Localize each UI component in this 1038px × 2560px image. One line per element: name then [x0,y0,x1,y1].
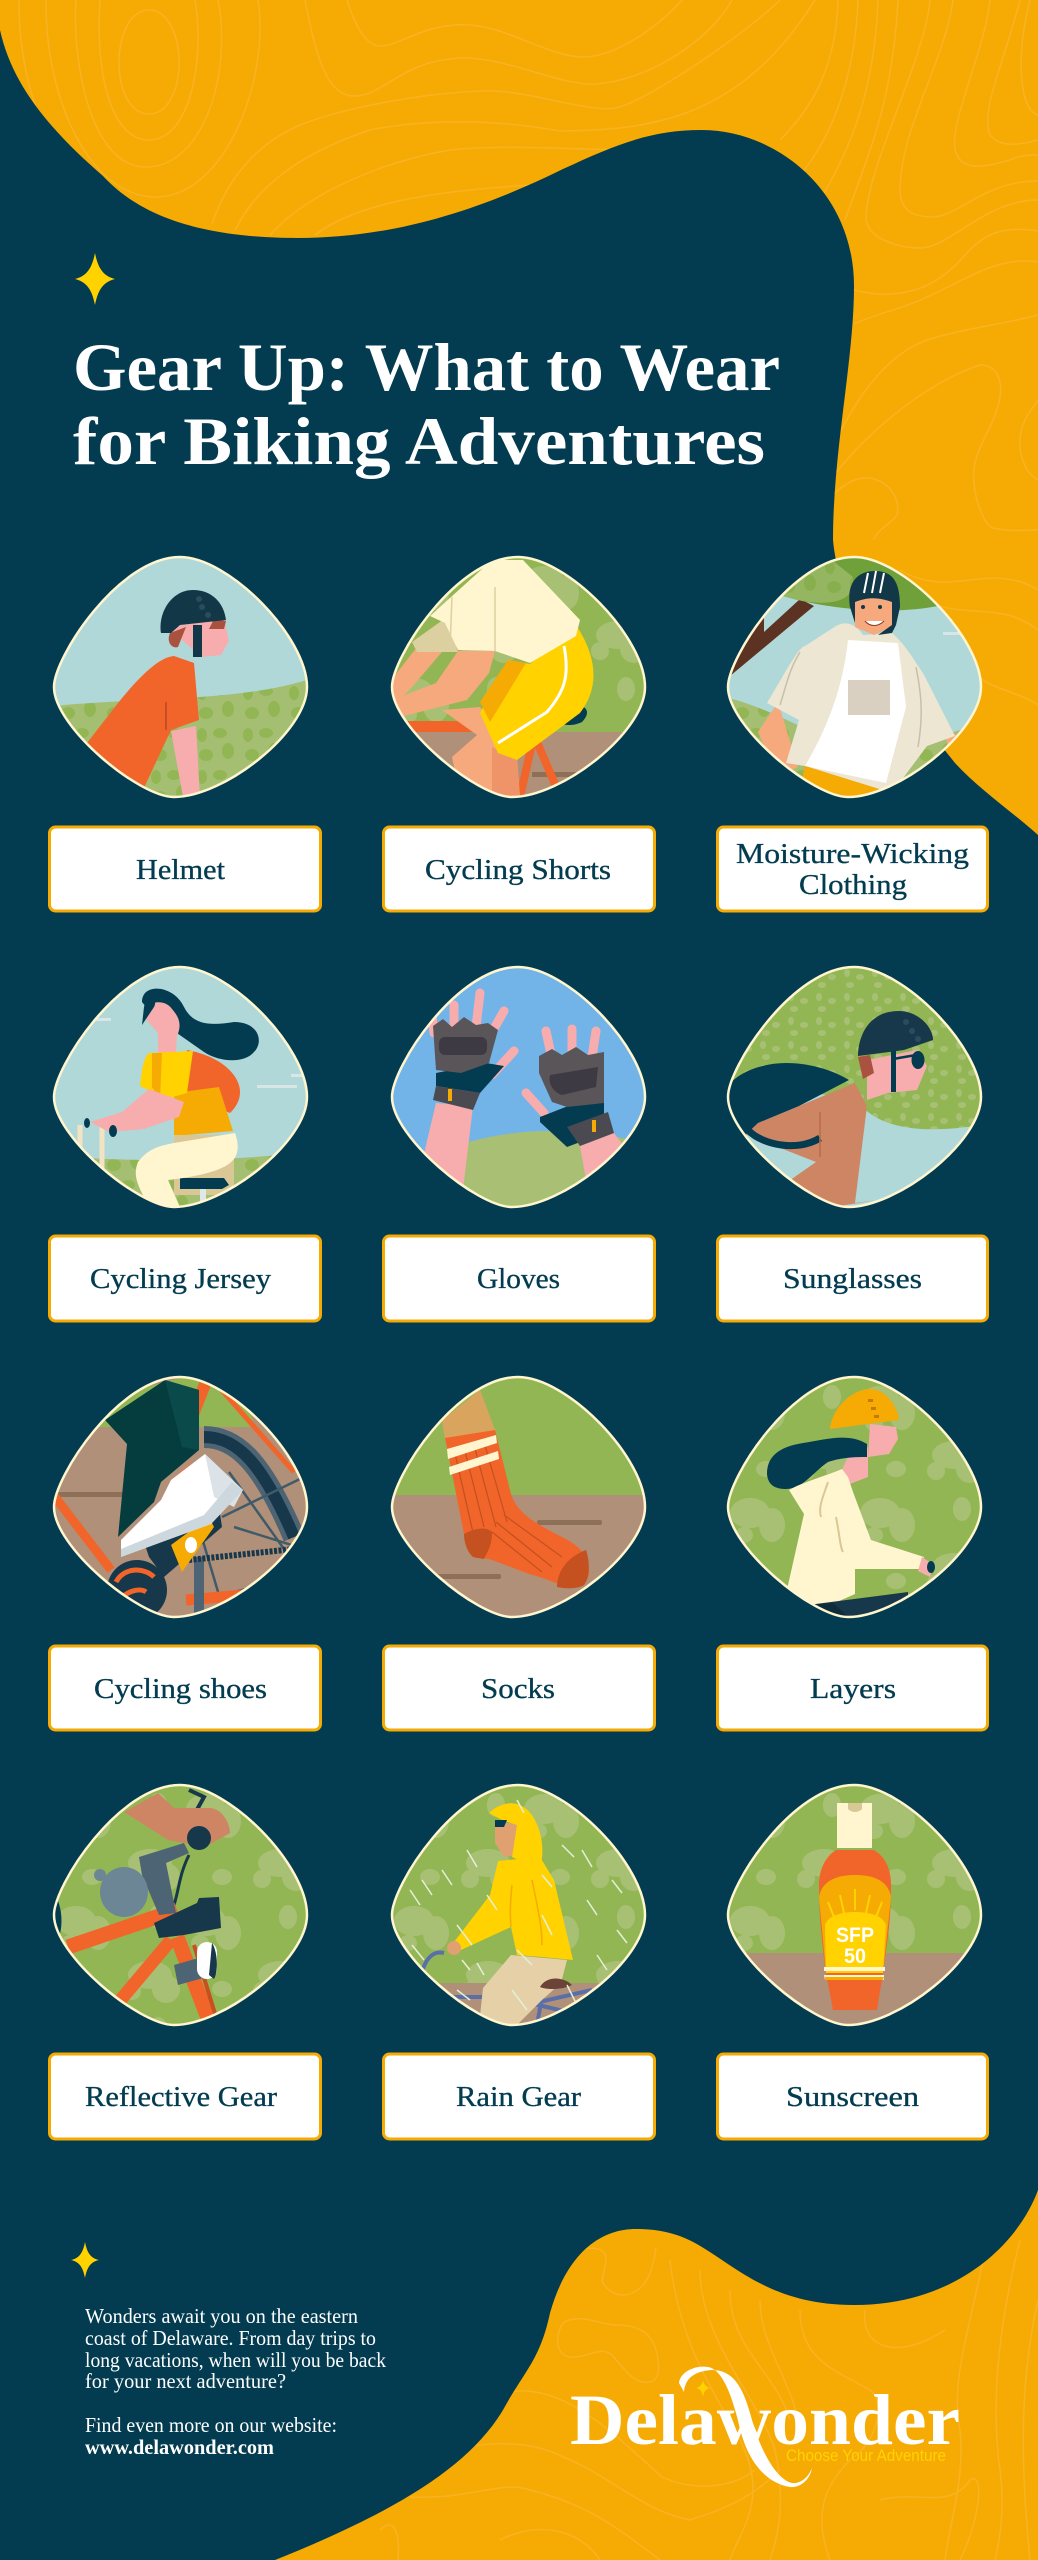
icon: top sparkle [75,253,115,305]
sfp label text: 50 [844,1945,866,1968]
sfp label text: SFP [836,1924,874,1947]
footer text [85,2304,386,2459]
label: sunscreen [718,2054,988,2139]
label: sunglasses: Sunglasses [783,1263,922,1295]
label: moisture-wicking clothing [718,827,988,911]
label: moisture-wicking clothing: Moisture-Wicking [736,838,969,870]
label: cycling shoes [50,1646,320,1730]
label: layers: Layers [810,1673,896,1705]
logo: Delawonder: Choose Your Adventure [786,2446,946,2465]
logo: Delawonder [570,2367,960,2487]
panel: sunscreen [718,1785,988,2139]
panel: sunglasses [718,967,988,1321]
panel: rain gear [384,1785,654,2139]
panel: cycling shorts [384,557,654,911]
label: helmet [50,827,320,911]
label: rain gear [384,2054,654,2139]
panel: helmet [50,557,320,911]
label: helmet: Helmet [136,854,225,886]
label: cycling shorts [384,827,654,911]
icon: bottom sparkle [71,2242,99,2278]
label: gloves [384,1236,654,1321]
label: rain gear: Rain Gear [456,2081,581,2113]
footer text: Find even more on our website: [85,2413,337,2437]
illustration: helmet [54,557,307,797]
panel: layers [718,1377,988,1730]
label: cycling shorts: Cycling Shorts [425,854,611,886]
illustration: cycling jersey [54,967,307,1209]
illustration: moisture-wicking clothing [728,557,981,797]
footer text: for your next adventure? [85,2369,286,2393]
label: moisture-wicking clothing: Clothing [799,869,907,901]
panel: moisture-wicking clothing [718,557,988,911]
footer text: www.delawonder.com [85,2435,274,2459]
footer text: Wonders await you on the eastern [85,2304,358,2328]
label: sunglasses [718,1236,988,1321]
label: socks [384,1646,654,1730]
label: socks: Socks [481,1673,555,1705]
footer text: long vacations, when will you be back [85,2348,386,2372]
panel: cycling shoes [50,1377,320,1730]
illustration: sunglasses [728,967,981,1207]
title [73,329,780,479]
panel: gloves [384,967,654,1321]
sfp label text [836,1928,874,1963]
footer text: coast of Delaware. From day trips to [85,2326,376,2350]
panel: socks [384,1377,654,1730]
illustration: layers [728,1377,981,1617]
panel: reflective gear [50,1785,320,2139]
illustration: sunscreen [728,1785,981,2025]
label: cycling shoes: Cycling shoes [94,1673,267,1705]
logo: Delawonder: Delawonder [570,2380,960,2460]
label: layers [718,1646,988,1730]
label: cycling jersey [50,1236,320,1321]
title: Gear Up: What to Wear [73,329,780,405]
illustration: reflective gear [54,1785,307,2025]
illustration: rain gear [392,1785,645,2025]
label: reflective gear [50,2054,320,2139]
illustration: socks [392,1377,645,1617]
label: gloves: Gloves [477,1263,560,1295]
title: for Biking Adventures [73,403,765,479]
illustration: cycling shorts [392,557,645,797]
illustration: cycling shoes [54,1377,314,1620]
label: sunscreen: Sunscreen [786,2081,920,2113]
label: cycling jersey: Cycling Jersey [90,1263,272,1295]
illustration: gloves [392,967,645,1207]
panel: cycling jersey [50,967,320,1321]
label: reflective gear: Reflective Gear [85,2081,277,2113]
